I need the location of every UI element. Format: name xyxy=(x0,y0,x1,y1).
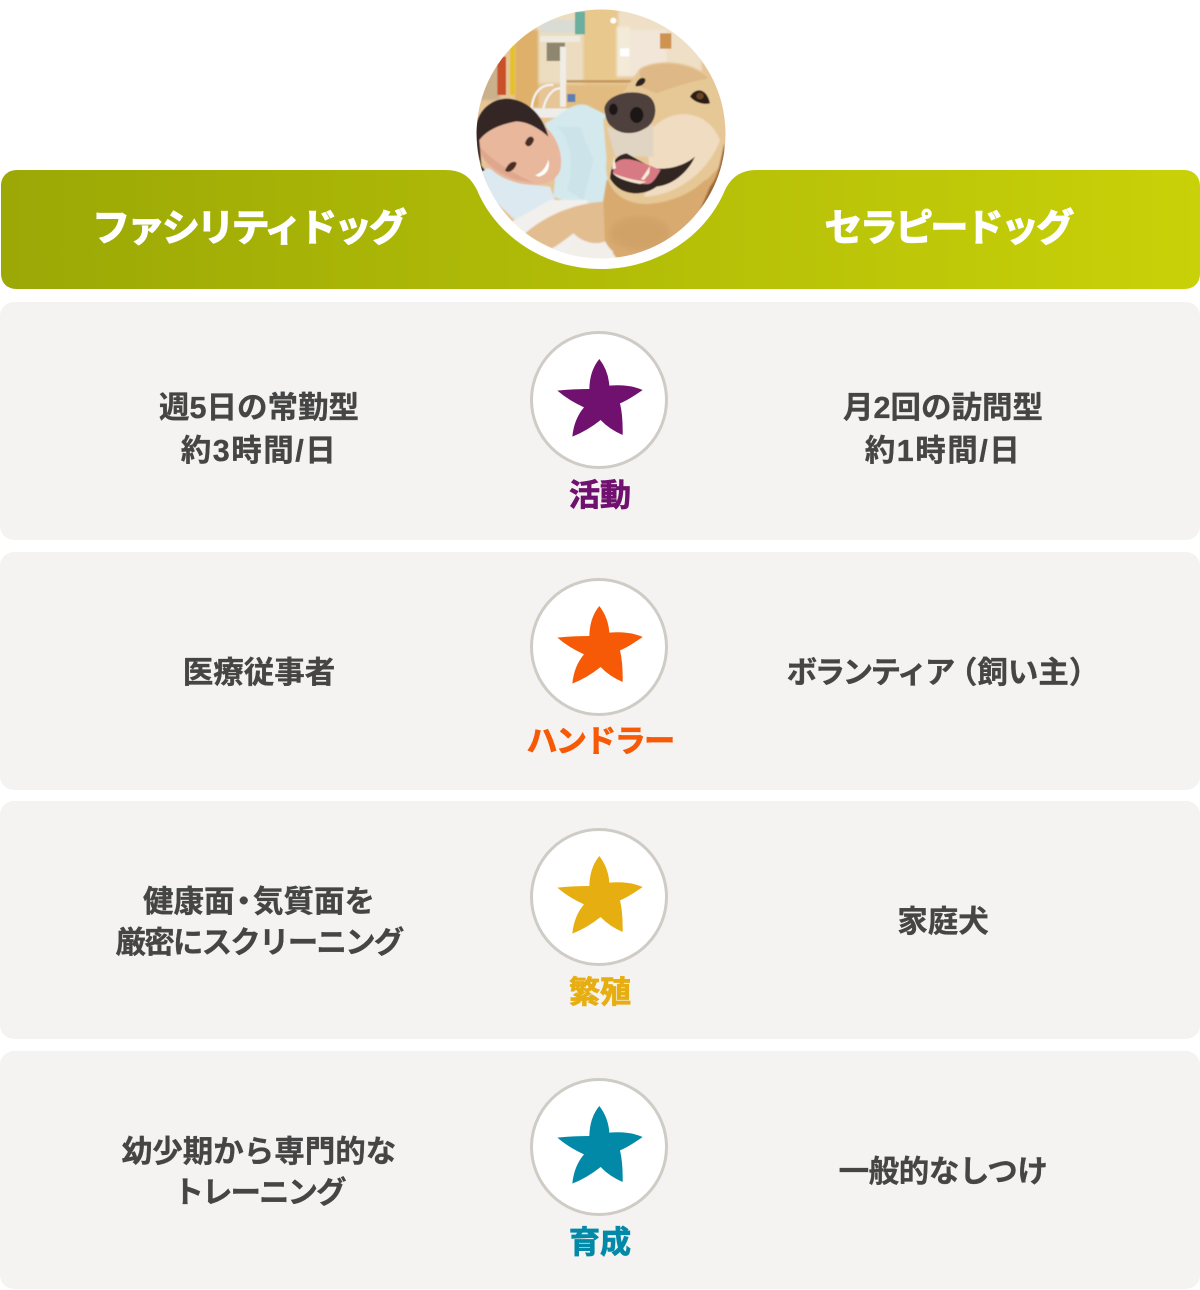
text: therapy dog training: 一般的なしつけ xyxy=(839,1155,1047,1189)
photo: child and golden retriever in a hospital bed xyxy=(476,10,726,258)
text: facility dog training: 幼少期から専門的な xyxy=(122,1135,396,1169)
panel: training xyxy=(0,1051,1200,1289)
text: facility dog breeding: 厳密にスクリーニング xyxy=(116,926,402,960)
text: therapy dog activity: 月2回の訪問型 xyxy=(843,391,1043,425)
icon: orange star badge xyxy=(530,578,668,716)
panel: activity xyxy=(0,302,1200,540)
dog body and paw xyxy=(525,168,719,258)
text: facility dog training: トレーニング xyxy=(174,1176,344,1210)
heading: facility dog: ファシリティドッグ xyxy=(92,208,404,250)
label: training: 育成 xyxy=(569,1225,631,1260)
panel: breeding xyxy=(0,801,1200,1039)
pyjamas, pillow, sheets xyxy=(482,104,614,253)
label: breeding: 繁殖 xyxy=(569,975,631,1010)
text: therapy dog activity: 約1時間/日 xyxy=(865,434,1021,468)
text: therapy dog breeding: 家庭犬 xyxy=(897,905,989,939)
label: handler: ハンドラー xyxy=(526,724,674,759)
heading: therapy dog: セラピードッグ xyxy=(824,208,1072,250)
text: facility dog breeding: 健康面・気質面を xyxy=(143,885,375,919)
text: therapy dog handler: ボランティア（飼い主） xyxy=(787,656,1099,690)
icon: yellow star badge xyxy=(530,828,668,966)
text: facility dog activity xyxy=(159,391,359,468)
header band xyxy=(1,170,1200,289)
dog head xyxy=(603,62,729,210)
text: facility dog activity: 約3時間/日 xyxy=(181,434,337,468)
text: facility dog activity: 週5日の常勤型 xyxy=(159,391,359,425)
icon: teal star badge xyxy=(530,1078,668,1216)
text: facility dog handler: 医療従事者 xyxy=(183,656,335,690)
text: therapy dog activity xyxy=(843,391,1043,468)
panel: handler xyxy=(0,552,1200,790)
label: activity: 活動 xyxy=(569,478,631,513)
text: facility dog training xyxy=(122,1135,396,1210)
text: facility dog breeding xyxy=(116,885,404,960)
girl xyxy=(476,99,561,185)
icon: purple star badge xyxy=(530,331,668,469)
